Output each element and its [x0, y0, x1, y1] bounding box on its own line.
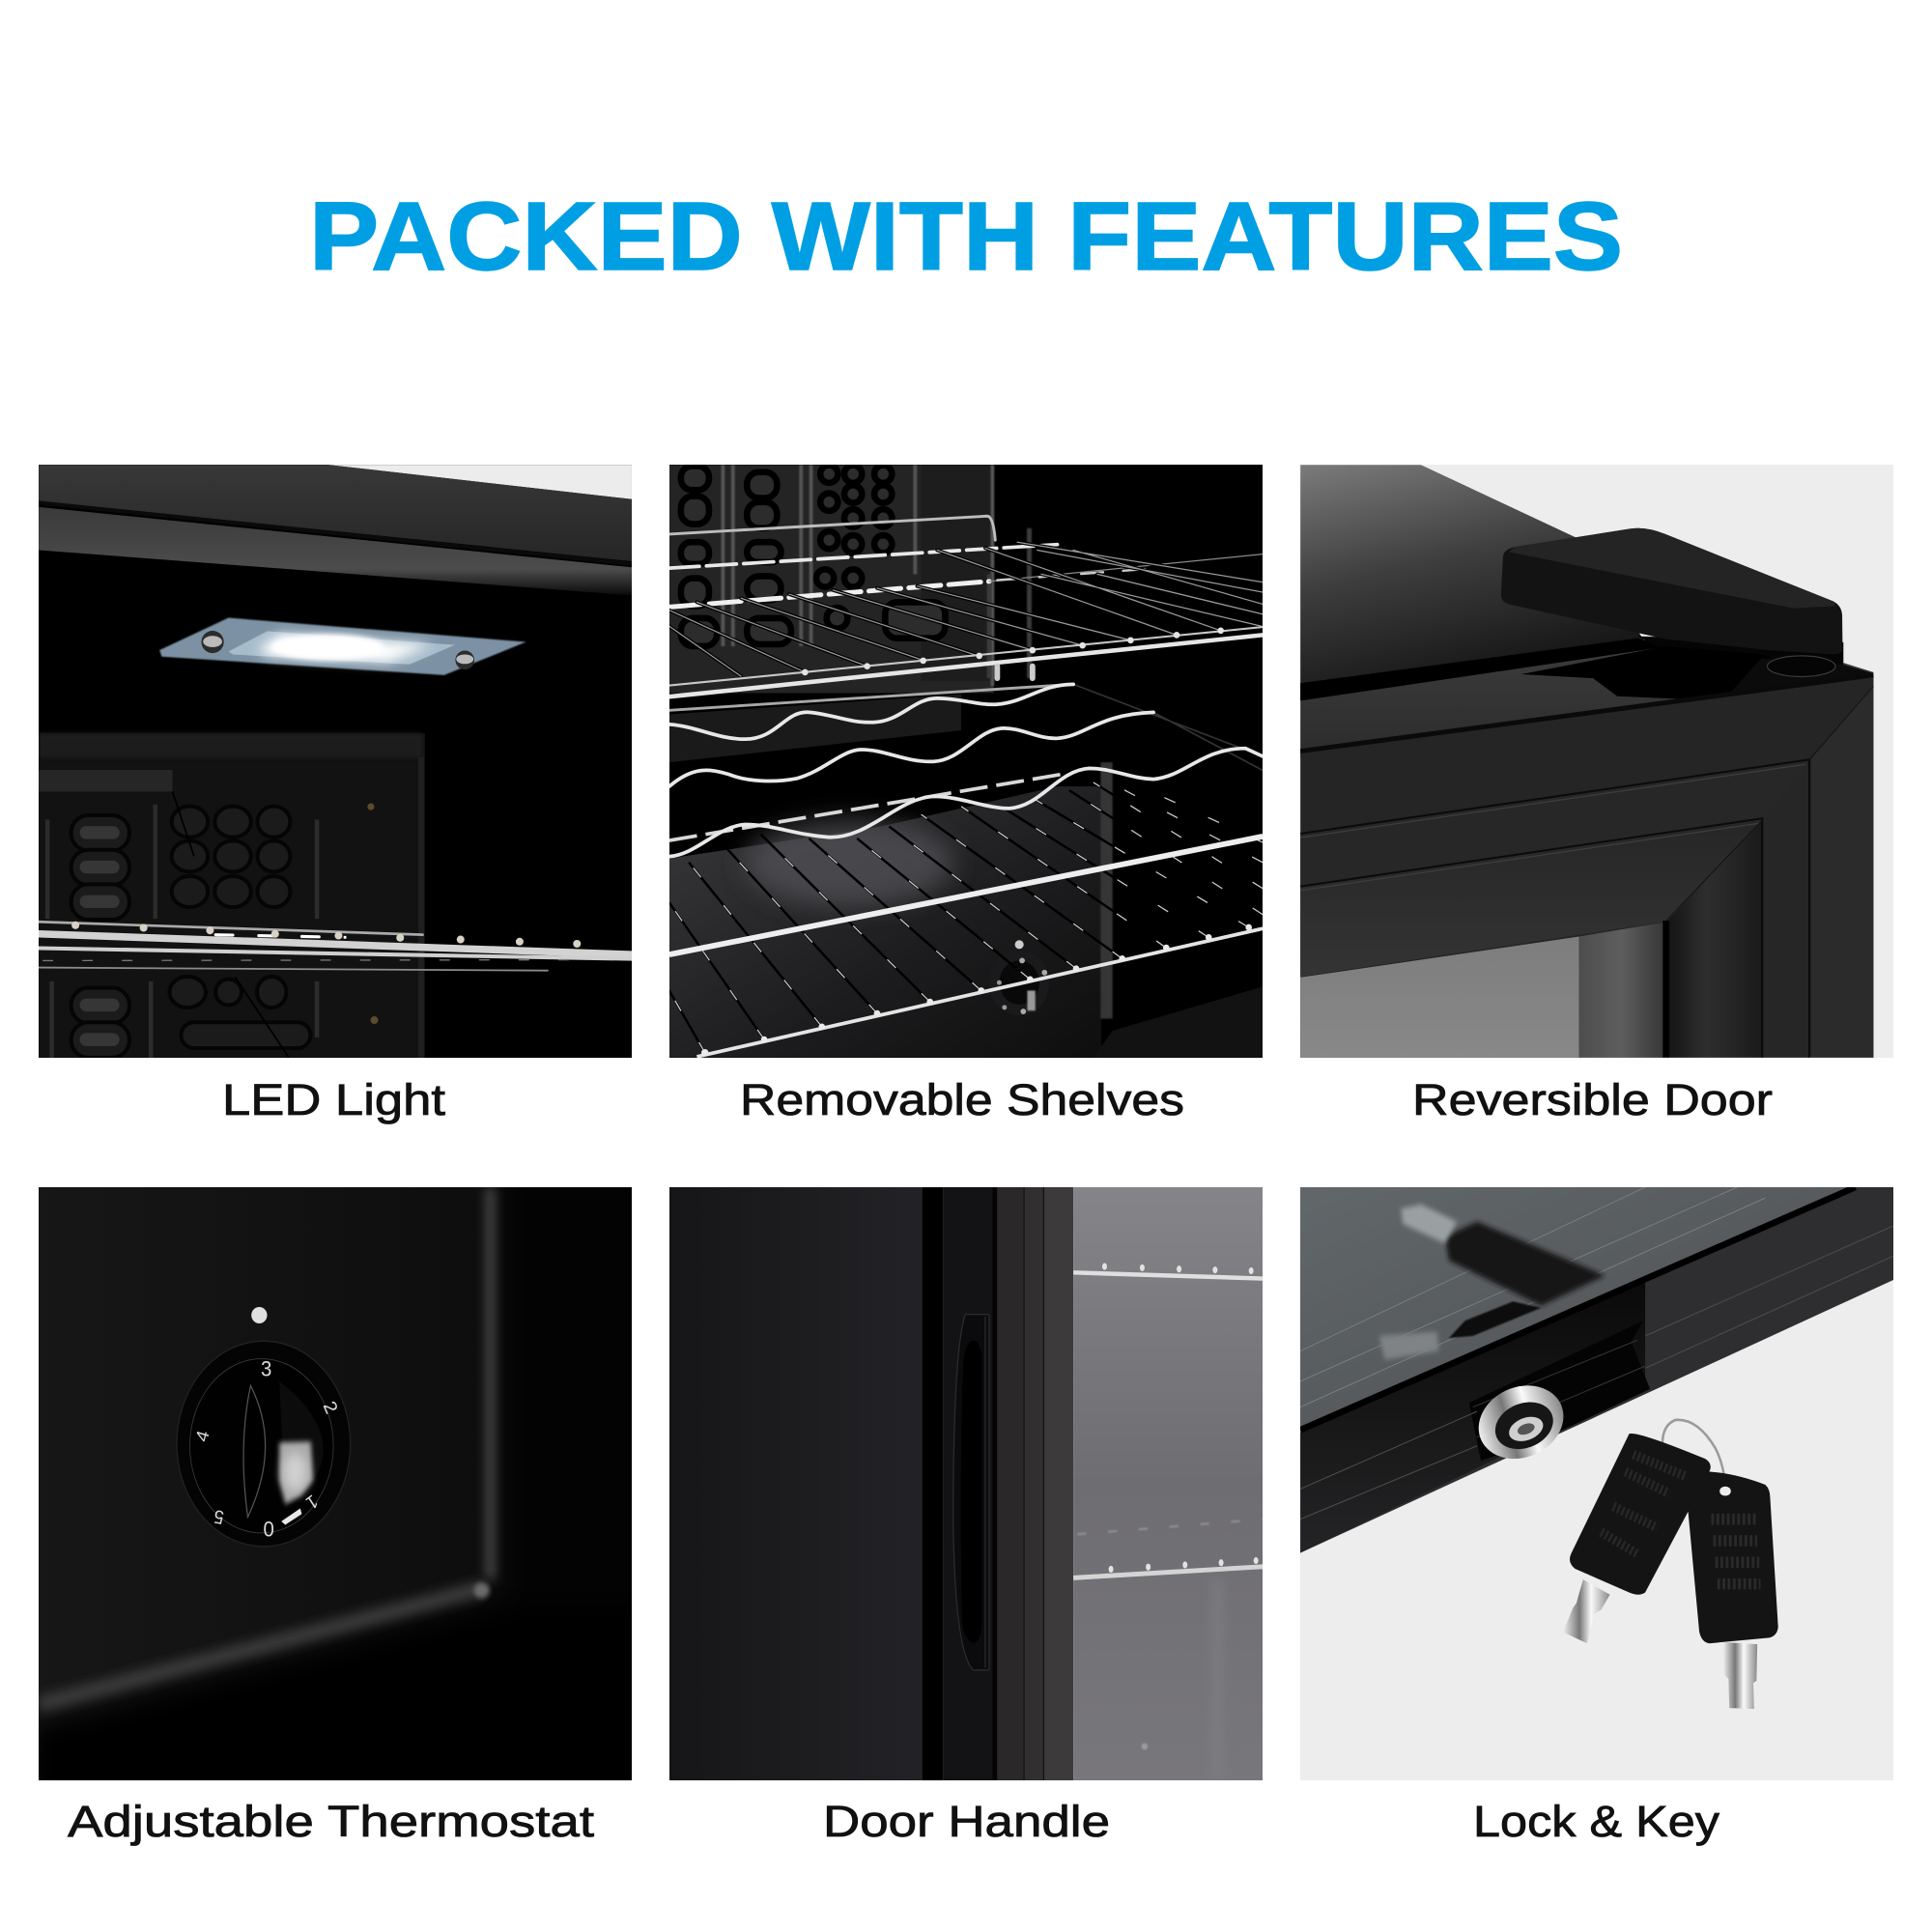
label: Removable Shelves: Removable Shelves	[740, 1075, 1184, 1124]
title: PACKED WITH FEATURES	[309, 183, 1623, 291]
hinge	[1501, 528, 1842, 676]
glass and shelves	[1073, 1187, 1265, 1782]
dial knob: 2	[319, 1398, 341, 1417]
label: Lock & Key: Lock & Key	[1473, 1797, 1720, 1846]
label: Door Handle: Door Handle	[823, 1797, 1110, 1846]
wall seams	[39, 1187, 491, 1705]
dial knob	[177, 1341, 351, 1547]
panel: lock and key	[1300, 1187, 1893, 1780]
door frame	[1300, 1187, 1893, 1552]
panel: removable shelves	[669, 465, 1263, 1058]
glass window	[1300, 937, 1579, 1058]
indicator dot	[251, 1307, 268, 1323]
lock cylinder	[1478, 1385, 1563, 1459]
lower shelf floor	[669, 786, 1101, 1058]
panel: reversible door	[1300, 465, 1893, 1058]
left key	[1563, 1434, 1711, 1643]
rear wall section	[39, 733, 425, 1058]
dial knob: 4	[191, 1428, 213, 1444]
wavy bottle racks	[669, 684, 1263, 857]
panel: LED light	[35, 460, 639, 1064]
label: LED Light: LED Light	[222, 1075, 446, 1124]
cabinet top surface	[1300, 465, 1645, 691]
recessed handle	[953, 1315, 989, 1670]
label: Adjustable Thermostat: Adjustable Thermostat	[68, 1797, 595, 1846]
right key	[1686, 1471, 1778, 1709]
panel: adjustable thermostat	[39, 1187, 632, 1780]
wire shelf	[39, 922, 632, 971]
key ring	[1662, 1418, 1725, 1474]
top wire shelf	[669, 516, 1263, 710]
panel: door handle	[669, 1187, 1265, 1782]
dial knob: 3	[261, 1357, 271, 1381]
dial knob: 5	[213, 1506, 225, 1528]
LED lamp	[159, 618, 526, 675]
mid back panel	[669, 695, 961, 762]
reflected keys	[1378, 1205, 1605, 1359]
glass	[1300, 1187, 1854, 1429]
label: Reversible Door: Reversible Door	[1412, 1075, 1773, 1124]
floor shelf wires	[669, 775, 1263, 1057]
dial knob: 1	[302, 1491, 322, 1514]
door frame bands	[1300, 677, 1873, 1058]
embossed evaporator pattern	[71, 807, 310, 1058]
dial knob: 0	[263, 1518, 274, 1542]
rear wall with embossed pattern	[669, 465, 1030, 693]
drain fitting	[997, 940, 1047, 1014]
